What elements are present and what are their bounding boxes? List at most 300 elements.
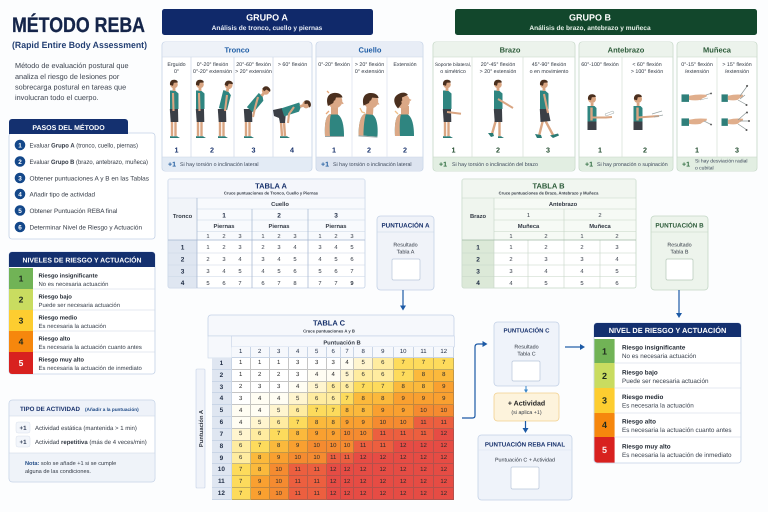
panel: brazo: o simétrico — [440, 69, 466, 75]
box: puntuación B — [651, 216, 708, 290]
table C: 7 — [442, 360, 445, 366]
panel: pasos del método: Añadir tipo de actividad — [30, 191, 95, 198]
table C: 7 — [239, 479, 242, 485]
table C: 9 — [277, 455, 280, 461]
panel: tronco: 1 — [174, 146, 178, 154]
panel: pasos del método: Evaluar Grupo B (brazo, antebrazo, muñeca) — [30, 159, 148, 166]
panel: brazo: +1 — [439, 162, 447, 168]
box: puntuación REBA final: PUNTUACIÓN REBA FINAL — [485, 440, 565, 448]
panel: pasos del método: Obtener Puntuación REBA final — [30, 208, 117, 215]
table A: 3 — [261, 256, 265, 263]
table B: 3 — [615, 244, 619, 251]
panel: pasos del método: Obtener puntuaciones A y B en las Tablas — [30, 175, 149, 182]
panel: tronco — [162, 42, 312, 171]
table C: 2 — [277, 372, 280, 378]
panel: tronco: Si hay torsión o inclinación lateral — [180, 162, 259, 168]
table B: 3 — [509, 268, 513, 275]
panel: tipo de actividad: TIPO DE ACTIVIDAD — [20, 406, 80, 413]
table C: 12 — [420, 491, 427, 497]
panel: brazo: o en movimiento — [530, 69, 568, 75]
table C: 6 — [315, 396, 318, 402]
table C: 3 — [277, 349, 280, 355]
table A: 5 — [334, 257, 338, 263]
panel: brazo: 45°-90° flexión — [532, 62, 566, 68]
table C: 9 — [296, 443, 299, 449]
table A: 2 — [206, 256, 210, 263]
table A: 6 — [293, 268, 297, 275]
panel: niveles de riesgo: Puede ser necesaria actuación — [38, 302, 120, 309]
table B: 4 — [580, 269, 584, 275]
panel: brazo: 2 — [496, 146, 500, 154]
panel: brazo: Brazo — [500, 46, 521, 54]
table C: 12 — [420, 479, 427, 485]
table C: 4 — [258, 396, 261, 402]
table A: 2 — [181, 256, 185, 264]
box: puntuación B: Tabla B — [671, 250, 689, 256]
table A: 1 — [206, 234, 210, 240]
table A: 6 — [261, 280, 265, 287]
box: puntuación C: PUNTUACIÓN C — [504, 326, 550, 334]
panel: niveles de riesgo: Riesgo insignificante — [38, 272, 98, 280]
table C: 7 — [258, 443, 261, 449]
table B: 1 — [509, 234, 513, 240]
panel: tronco: > 60° flexión — [278, 62, 307, 68]
table C: 5 — [239, 431, 242, 437]
table C: 6 — [277, 420, 280, 426]
table C: 12 — [379, 455, 386, 461]
panel: antebrazo: 2 — [643, 146, 647, 154]
panel: cuello: 2 — [403, 146, 407, 154]
box: más actividad: (si aplica +1) — [511, 410, 542, 416]
figure: tronco 2b — [218, 80, 234, 138]
table C: 12 — [344, 491, 350, 497]
table A: 4 — [334, 245, 338, 251]
table A: 3 — [318, 244, 322, 251]
table A: 2 — [277, 233, 281, 240]
panel: tronco: Erguido — [167, 62, 186, 68]
table C: 4 — [239, 420, 242, 426]
table C: 6 — [332, 349, 335, 355]
panel: tipo de actividad: +1 — [19, 425, 27, 432]
table C: 7 — [381, 384, 384, 390]
box: más actividad — [494, 393, 559, 421]
table C: 8 — [258, 455, 261, 461]
table C: 9 — [381, 408, 384, 414]
panel: nivel de riesgo y actuación: Riesgo alto — [622, 418, 656, 426]
panel: pasos del método: 5 — [18, 208, 22, 215]
figure: antebrazo 2 — [634, 94, 663, 130]
panel: niveles de riesgo — [9, 252, 155, 374]
table B: 2 — [598, 212, 602, 219]
table C: 8 — [361, 349, 365, 355]
table C: 10 — [400, 349, 406, 355]
table A: 1 — [318, 234, 322, 240]
table B: 4 — [544, 269, 548, 275]
arrow: puntuación B a nivel de riesgo — [676, 290, 682, 318]
table C: 11 — [420, 420, 427, 426]
panel: nivel de riesgo y actuación: 2 — [602, 371, 607, 381]
panel: tipo de actividad: (Añadir a la puntuación) — [85, 407, 139, 412]
table C: 4 — [296, 349, 299, 355]
figure: cuello 1 — [325, 91, 344, 137]
table C: 9 — [401, 396, 405, 402]
table C: 11 — [314, 479, 320, 485]
panel: tronco: 2 — [210, 146, 214, 154]
panel: tipo de actividad: Actividad estática (mantenida > 1 min) — [35, 425, 137, 432]
panel: nivel de riesgo y actuación: Es necesaria la actuación cuanto antes — [622, 427, 732, 434]
table C: 3 — [315, 360, 318, 366]
table A: 4 — [318, 257, 322, 263]
arrow: C a nivel de riesgo — [565, 344, 585, 350]
table C: 6 — [239, 443, 242, 449]
table C: 3 — [258, 384, 261, 390]
table C: 12 — [440, 491, 447, 497]
table C: 12 — [330, 467, 337, 473]
table C: 12 — [420, 467, 427, 473]
table A: 3 — [238, 244, 242, 251]
table C: 12 — [218, 490, 225, 497]
table C: 11 — [295, 467, 301, 473]
table C: 5 — [258, 420, 261, 426]
table C: 9 — [258, 491, 261, 497]
table C: 9 — [258, 479, 261, 485]
arrow: puntuación A a tabla C — [400, 290, 406, 310]
table A: 6 — [334, 268, 338, 275]
table B: 2 — [580, 244, 584, 251]
table A: 2 — [334, 233, 338, 240]
table C: 9 — [220, 455, 223, 462]
figure: cuello 2 — [358, 92, 380, 138]
table C: 12 — [379, 479, 386, 485]
table B: 4 — [509, 281, 513, 287]
table B: 4 — [476, 280, 480, 287]
panel: nivel de riesgo y actuación: Puede ser necesaria actuación — [622, 378, 709, 385]
table C: 1 — [220, 360, 223, 367]
panel: tronco: 4 — [290, 146, 294, 154]
table C: 5 — [315, 384, 318, 390]
table C: 11 — [314, 467, 320, 473]
table B: Cruce puntuaciones de Brazo, Antebrazo y Muñeca — [499, 191, 599, 196]
panel: tronco: 0° — [174, 69, 179, 75]
table C: 2 — [258, 372, 261, 378]
panel: cuello: 0° extensión — [355, 69, 384, 75]
panel: niveles de riesgo: 5 — [19, 358, 24, 368]
panel: tipo de actividad: Actividad repetitiva (más de 4 veces/min) — [35, 439, 147, 446]
panel: niveles de riesgo: Riesgo alto — [38, 336, 71, 342]
table A: 2 — [222, 233, 226, 240]
table A: 9 — [350, 280, 354, 287]
table C: 7 — [361, 384, 365, 390]
table C: 6 — [239, 455, 242, 461]
panel: pasos del método: 2 — [18, 159, 22, 166]
table C: 12 — [400, 455, 406, 461]
table B: 2 — [544, 244, 548, 251]
table C: 3 — [239, 396, 242, 402]
table C: 12 — [379, 491, 386, 497]
panel: cuello: Extensión — [393, 62, 417, 68]
panel: muñeca: 0°-15° flexión — [681, 62, 713, 68]
table A: 2 — [222, 244, 226, 251]
table A: 3 — [334, 212, 338, 220]
table C: 8 — [296, 431, 299, 437]
panel: tronco: 0°-20° flexión — [197, 62, 228, 68]
header: grupo B: GRUPO B — [569, 12, 611, 22]
table C: 4 — [220, 395, 223, 402]
panel: nivel de riesgo y actuación: Riesgo bajo — [622, 370, 658, 376]
table C: 6 — [381, 360, 384, 366]
table A: Cuello — [271, 201, 289, 208]
table B: 1 — [509, 245, 513, 251]
table C: 9 — [315, 431, 318, 437]
table B: 2 — [615, 233, 619, 240]
title: MÉTODO REBA — [12, 13, 145, 37]
panel: muñeca: > 15° flexión — [722, 62, 752, 68]
panel: cuello — [316, 42, 423, 171]
table A: 6 — [350, 256, 354, 263]
table C: 10 — [294, 455, 301, 461]
panel: pasos del método: 3 — [18, 175, 22, 182]
box: puntuación C — [494, 322, 559, 386]
table A: 5 — [238, 269, 242, 275]
panel: muñeca: Si hay desviación radial — [695, 158, 748, 164]
table C: 10 — [344, 431, 350, 437]
table A: 3 — [350, 233, 354, 240]
table C: 12 — [360, 479, 366, 485]
table A: 4 — [238, 257, 242, 263]
panel: brazo: Soporte bilateral, — [435, 62, 471, 68]
table C: 11 — [344, 455, 350, 461]
panel: pasos del método: 1 — [18, 142, 22, 149]
table C: 8 — [442, 372, 445, 378]
panel: brazo: 3 — [546, 146, 550, 154]
table C: 8 — [361, 408, 365, 414]
panel: muñeca: Muñeca — [703, 46, 732, 54]
table B: 2 — [476, 256, 480, 264]
table C: 11 — [295, 491, 301, 497]
table A: 1 — [222, 212, 226, 220]
table C: 11 — [420, 431, 427, 437]
table C: 12 — [440, 443, 447, 449]
arrow: C a actividad — [524, 386, 528, 393]
table C: 10 — [400, 420, 406, 426]
table A: Piernas — [269, 223, 289, 230]
header: grupo B — [455, 9, 757, 35]
label: puntuación A lateral — [196, 369, 205, 488]
table C: 9 — [332, 431, 335, 437]
table C: 9 — [381, 349, 384, 355]
table C: 3 — [220, 384, 223, 391]
table A: Cruce puntuaciones de Tronco, Cuello y Piernas — [224, 191, 319, 196]
table A: 1 — [261, 234, 265, 240]
table C: 4 — [345, 360, 349, 366]
table A: 4 — [222, 269, 226, 275]
table C: 2 — [220, 372, 223, 379]
table C: 12 — [344, 467, 350, 473]
box: puntuación B: PUNTUACIÓN B — [655, 222, 704, 230]
table C: 4 — [332, 372, 335, 378]
table C: 8 — [401, 384, 405, 390]
table C: 3 — [296, 360, 299, 366]
table C: 4 — [277, 396, 280, 402]
table C: 8 — [220, 443, 223, 450]
panel: antebrazo — [579, 42, 673, 171]
table C: 8 — [345, 408, 349, 414]
label: puntuación A lateral: Puntuación A — [198, 409, 205, 447]
table A: 7 — [277, 281, 281, 287]
panel: cuello: +1 — [321, 162, 329, 168]
table A: 4 — [261, 269, 265, 275]
table A: Piernas — [326, 223, 346, 230]
table A: 3 — [293, 233, 297, 240]
panel: tronco: > 20° extensión — [235, 69, 272, 75]
table A: 4 — [277, 257, 281, 263]
panel: pasos del método: 4 — [18, 191, 22, 198]
table C: 8 — [422, 372, 425, 378]
panel: tipo de actividad — [9, 400, 155, 482]
panel: niveles de riesgo: Riesgo muy alto — [38, 356, 84, 364]
description text — [15, 61, 129, 102]
panel: niveles de riesgo: 3 — [19, 316, 24, 326]
table C: 12 — [330, 491, 337, 497]
table B: 5 — [615, 269, 619, 275]
panel: antebrazo: < 60° flexión — [632, 62, 662, 68]
panel: pasos del método — [9, 119, 155, 239]
table C: 11 — [295, 479, 301, 485]
description text: sobrecarga postural en tareas que — [15, 82, 126, 92]
table C: 10 — [275, 491, 282, 497]
table C: 6 — [332, 396, 335, 402]
table C: 5 — [296, 396, 299, 402]
box: puntuación C: Resultado — [514, 344, 539, 350]
table C: 2 — [239, 384, 242, 390]
subtitle: (Rapid Entire Body Assessment) — [12, 40, 147, 50]
table C: 6 — [361, 372, 365, 378]
panel: tipo de actividad: Nota: solo se añade +1 si se cumple — [25, 460, 116, 467]
table C: 7 — [401, 372, 405, 378]
panel: antebrazo: Antebrazo — [608, 46, 645, 54]
panel: niveles de riesgo: Riesgo bajo — [38, 294, 72, 300]
panel: niveles de riesgo: 1 — [19, 274, 24, 284]
panel: muñeca: 1 — [695, 146, 699, 154]
table B: 5 — [544, 281, 548, 287]
table C: 11 — [380, 431, 386, 437]
table C: 11 — [360, 443, 366, 449]
panel: tipo de actividad: +1 — [19, 439, 27, 446]
table C: 5 — [220, 407, 223, 414]
table C: 10 — [275, 479, 282, 485]
table A: TABLA A — [255, 182, 287, 190]
table C: 12 — [344, 479, 350, 485]
panel: cuello: 1 — [332, 146, 336, 154]
panel: niveles de riesgo: 4 — [19, 336, 24, 346]
panel: tronco: 0°-20° extensión — [193, 69, 232, 75]
table B: 3 — [580, 256, 584, 263]
panel: nivel de riesgo y actuación: Es necesaria la actuación — [622, 402, 694, 410]
table C: 12 — [400, 443, 406, 449]
description text: Método de evaluación postural que — [15, 61, 129, 70]
panel: brazo — [433, 42, 575, 171]
table C: 8 — [381, 396, 384, 402]
table C: 10 — [440, 408, 447, 414]
panel: muñeca — [677, 42, 757, 172]
table C: 5 — [315, 349, 318, 355]
table C: 7 — [220, 431, 223, 438]
table B: 3 — [544, 256, 548, 263]
panel: niveles de riesgo: Riesgo medio — [38, 314, 78, 322]
table C: 12 — [420, 455, 427, 461]
table C: 11 — [420, 349, 427, 355]
box: puntuación A: PUNTUACIÓN A — [381, 222, 430, 230]
panel: nivel de riesgo y actuación: Riesgo insignificante — [622, 344, 686, 352]
figure: tronco 1 — [170, 80, 180, 138]
panel: tipo de actividad: alguna de las condiciones. — [25, 468, 91, 475]
table C: Cruce puntuaciones A y B — [303, 328, 355, 334]
table C: 7 — [332, 408, 335, 414]
box: puntuación A: Tabla A — [397, 250, 415, 256]
table C: 8 — [315, 420, 318, 426]
table B: 6 — [615, 280, 619, 287]
table C: 4 — [258, 408, 261, 414]
panel: cuello: 0°-20° flexión — [318, 62, 350, 68]
table C: 7 — [239, 467, 242, 473]
table C: 3 — [296, 372, 299, 378]
table C: 12 — [360, 467, 366, 473]
table C: 6 — [220, 419, 223, 426]
table A: 7 — [318, 281, 322, 287]
table C: 10 — [420, 408, 427, 414]
table C: 4 — [296, 384, 299, 390]
table A: 5 — [206, 281, 210, 287]
table A: 7 — [238, 281, 242, 287]
table C: 7 — [315, 408, 318, 414]
table C: 7 — [401, 360, 405, 366]
table C: 5 — [345, 372, 349, 378]
table C: 12 — [330, 479, 337, 485]
panel: brazo: Si hay torsión o inclinación del brazo — [452, 162, 538, 168]
table B: 2 — [544, 233, 548, 240]
table A: 7 — [334, 281, 338, 287]
box: más actividad: + Actividad — [508, 400, 545, 408]
box: puntuación A: Resultado — [393, 242, 418, 248]
table B: 1 — [476, 244, 480, 252]
table C: 5 — [361, 360, 365, 366]
table C: 9 — [345, 420, 349, 426]
table B: Brazo — [470, 214, 487, 220]
header: grupo B: Análisis de brazo, antebrazo y muñeca — [529, 25, 651, 32]
panel: cuello: 2 — [367, 146, 371, 154]
table C: 10 — [275, 467, 282, 473]
table B: 5 — [580, 281, 584, 287]
table B: 2 — [509, 256, 513, 263]
panel: nivel de riesgo y actuación: Riesgo muy alto — [622, 444, 671, 450]
panel: brazo: 20°-45° flexión — [481, 62, 515, 68]
panel: cuello: Si hay torsión o inclinación lateral — [333, 162, 412, 168]
table A: 5 — [293, 257, 297, 263]
table C: 7 — [239, 491, 242, 497]
table C: 11 — [314, 491, 320, 497]
panel: antebrazo: 60°-100° flexión — [581, 62, 619, 68]
panel: antebrazo: > 100° flexión — [631, 69, 663, 75]
table B: Muñeca — [589, 223, 612, 230]
table C: 4 — [239, 408, 242, 414]
table C: 9 — [442, 396, 445, 402]
figure: muñeca 2 — [722, 85, 750, 131]
table C: 7 — [277, 431, 280, 437]
box: puntuación REBA final: Puntuación C + Actividad — [495, 458, 555, 464]
table C: 7 — [345, 396, 349, 402]
panel: nivel de riesgo y actuación: NIVEL DE RIESGO Y ACTUACIÓN — [609, 326, 726, 335]
table B: Muñeca — [518, 223, 540, 230]
